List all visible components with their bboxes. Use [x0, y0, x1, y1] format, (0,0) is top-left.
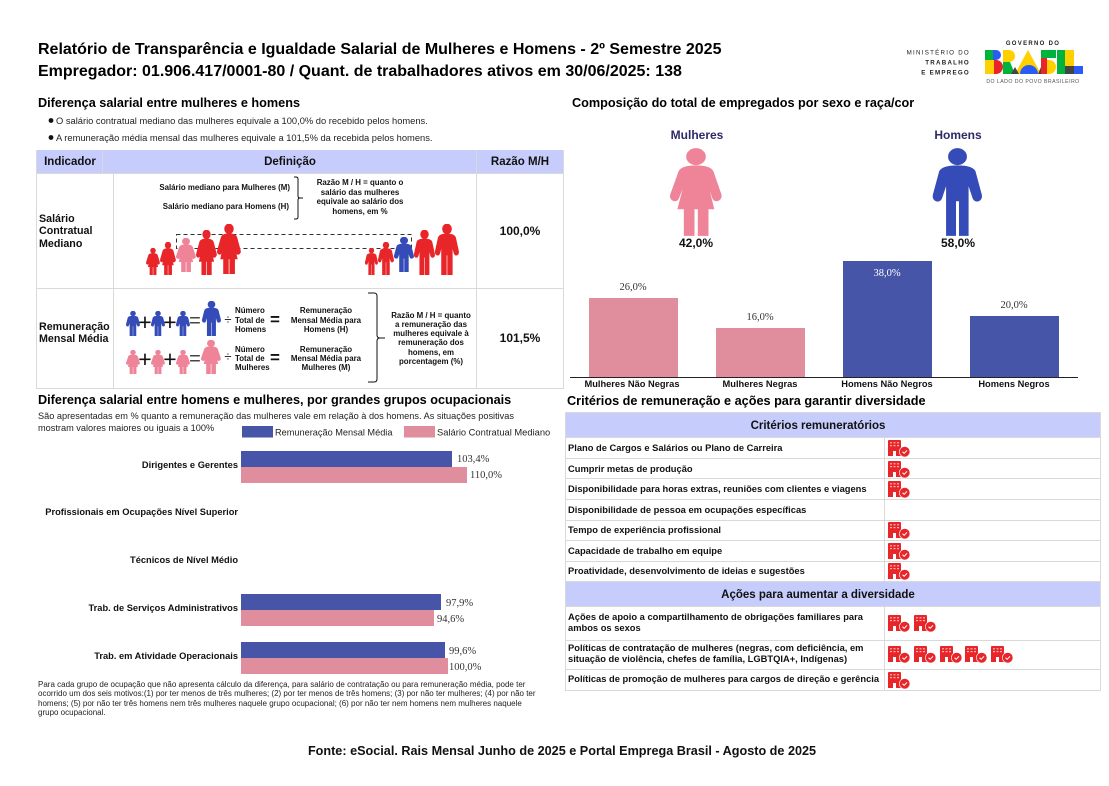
bar chart: grupos ocupacionais: 97,9%: [446, 598, 473, 609]
formula: women average: +: [138, 346, 152, 372]
bar chart: grupos ocupacionais: 110,0%: [470, 470, 502, 481]
table header: Indicador: [44, 156, 96, 168]
panel: indicator table: [36, 150, 564, 388]
dashed median box: [176, 234, 412, 248]
action labels: Ações de apoio a compartilhamento de obrigações familiares para: [568, 612, 864, 622]
formula: men average: Remuneração: [300, 306, 352, 315]
brace 2: [368, 293, 385, 382]
bar chart: grupos ocupacionais: 99,6%: [449, 646, 476, 657]
formula: women average: Mulheres: [235, 363, 270, 372]
text block: footnote: grupo ocupacional.: [38, 708, 106, 717]
icons: building check: [888, 440, 1013, 689]
formula: men average: [126, 301, 362, 336]
logo: governo do brasil: DO LADO DO POVO BRASILEIRO: [986, 79, 1080, 85]
header: ações: Ações para aumentar a diversidade: [721, 589, 915, 601]
formula: women average: Mulheres (M): [302, 363, 351, 372]
title: Relatório de Transparência e Igualdade Salarial de Mulheres e Homens - 2º Semestre 2025: [38, 41, 722, 58]
formula: women average: =: [270, 348, 280, 367]
text block: chart description: [38, 411, 514, 433]
row label: remuneração mensal média: [39, 321, 110, 345]
definition: razão text 2: Razão M / H = quanto: [391, 311, 471, 320]
criteria labels: Disponibilidade para horas extras, reuniões com clientes e viagens: [568, 484, 867, 494]
formula: women average: =: [189, 348, 201, 370]
row label: salário contratual mediano: Mediano: [39, 238, 83, 250]
bar chart: composição: 26,0%: [619, 282, 647, 293]
definition: razão text 2: porcentagem (%): [399, 357, 463, 366]
definition: razão text 1: equivale ao salário dos: [317, 197, 404, 206]
action labels: ambos os sexos: [568, 623, 641, 633]
row label: salário contratual mediano: [39, 213, 92, 250]
text block: bullets: [49, 116, 432, 143]
formula: women average: +: [163, 346, 177, 372]
header: critérios remuneratórios: Critérios remuneratórios: [751, 420, 885, 432]
row label: salário contratual mediano: Contratual: [39, 225, 92, 237]
logo: ministério do trabalho e emprego: TRABALHO: [925, 60, 970, 66]
legend: [242, 426, 550, 438]
title: Empregador: 01.906.417/0001-80 / Quant. de trabalhadores ativos em 30/06/2025: 138: [38, 63, 682, 80]
text block: footnote: Para cada grupo de ocupação que não apresenta cálculo da diferença, para salário de contratação ou para remuneração média, pode ter: [38, 680, 526, 689]
bar chart: composição: [570, 261, 1078, 389]
pictogram: homens: 58,0%: [941, 236, 975, 250]
definition: salário mediano labels: [159, 183, 290, 211]
icons: men group: [365, 224, 458, 275]
definition: razão text 1: Razão M / H = quanto o: [317, 178, 403, 187]
heading: diferença por grupos: Diferença salarial entre homens e mulheres, por grandes grupos ocupacionais: [38, 393, 511, 407]
formula: women average: Total de: [235, 354, 265, 363]
formula: men average: Homens (H): [304, 325, 349, 334]
text block: footnote: [38, 680, 536, 717]
formula: men average: +: [163, 309, 177, 335]
row label: remuneração mensal média: Remuneração: [39, 321, 110, 333]
pictogram: mulheres: [670, 128, 724, 250]
formula: women average: ÷: [224, 349, 232, 364]
formula: women average: Remuneração: [300, 345, 352, 354]
source footer: Fonte: eSocial. Rais Mensal Junho de 2025 e Portal Emprega Brasil - Agosto de 2025: [308, 744, 816, 758]
text block: chart description: São apresentadas em % quanto a remuneração das mulheres vale em relação à dos homens. As situações positivas: [38, 411, 514, 421]
formula: women average: [126, 340, 362, 374]
legend: Salário Contratual Mediano: [437, 428, 550, 438]
heading: critérios: Critérios de remuneração e ações para garantir diversidade: [567, 394, 926, 408]
row label: salário contratual mediano: Salário: [39, 213, 75, 225]
definition: razão text 2: a remuneração das: [395, 320, 468, 329]
definition: razão text 1: [317, 178, 404, 216]
title: [38, 41, 722, 80]
bar chart: grupos ocupacionais: Profissionais em Ocupações Nível Superior: [45, 507, 238, 517]
definition: razão text 2: remuneração dos: [398, 338, 465, 347]
bar chart: grupos ocupacionais: 100,0%: [449, 662, 482, 673]
criteria labels: [568, 443, 867, 576]
value: 100,0%: 100,0%: [500, 224, 541, 238]
panel: criteria table: [565, 412, 1101, 690]
row label: remuneração mensal média: Mensal Média: [39, 333, 110, 345]
action labels: [568, 612, 880, 684]
table header: Definição: [264, 156, 316, 168]
definition: razão text 2: mulheres equivale à: [393, 329, 469, 338]
bar chart: composição: 16,0%: [746, 312, 774, 323]
text block: bullets: A remuneração média mensal das mulheres equivale a 101,5% da recebida pelos homens.: [56, 133, 432, 143]
bar chart: composição: Mulheres Negras: [723, 379, 797, 389]
formula: men average: +: [138, 309, 152, 335]
text block: chart description: mostram valores maiores ou iguais a 100%: [38, 423, 214, 433]
criteria labels: Cumprir metas de produção: [568, 464, 693, 474]
formula: men average: Número: [235, 306, 265, 315]
heading: composição: Composição do total de empregados por sexo e raça/cor: [572, 96, 914, 110]
brace 1: [294, 177, 303, 219]
bar chart: grupos ocupacionais: [45, 451, 502, 674]
bar chart: grupos ocupacionais: Trab. de Serviços Administrativos: [88, 603, 238, 613]
logo: governo do brasil: [985, 41, 1083, 85]
pictogram: homens: [933, 128, 982, 250]
bar chart: grupos ocupacionais: Dirigentes e Gerentes: [142, 460, 238, 470]
criteria labels: Tempo de experiência profissional: [568, 525, 721, 535]
formula: men average: Mensal Média para: [291, 316, 362, 325]
definition: razão text 1: homens, em %: [332, 207, 388, 216]
bar chart: composição: Mulheres Não Negras: [584, 379, 680, 389]
table header: Razão M/H: [491, 156, 549, 168]
table header: [44, 156, 549, 168]
bar chart: composição: 20,0%: [1000, 300, 1028, 311]
bar chart: grupos ocupacionais: Técnicos de Nível Médio: [130, 555, 238, 565]
text block: footnote: ocorrido um dos seis motivos:(1) por ter menos de três mulheres; (2) por ter menos de três homens; (3) por não ter mulheres; (4) por não ter: [38, 689, 536, 698]
heading: diferença salarial: Diferença salarial entre mulheres e homens: [38, 96, 300, 110]
formula: women average: Mensal Média para: [291, 354, 362, 363]
criteria labels: Capacidade de trabalho em equipe: [568, 546, 722, 556]
value: 101,5%: 101,5%: [500, 331, 541, 345]
pictogram: mulheres: Mulheres: [671, 128, 724, 142]
action labels: Políticas de contratação de mulheres (negras, com deficiência, em: [568, 643, 863, 653]
bar chart: composição: Homens Negros: [978, 379, 1050, 389]
action labels: Políticas de promoção de mulheres para cargos de direção e gerência: [568, 674, 880, 684]
text block: bullets: O salário contratual mediano das mulheres equivale a 100,0% do recebido pelos homens.: [56, 116, 428, 126]
pictogram: homens: Homens: [934, 128, 982, 142]
logo: ministério do trabalho e emprego: E EMPREGO: [921, 70, 970, 76]
formula: men average: =: [189, 310, 201, 332]
logo: ministério do trabalho e emprego: MINISTÉRIO DO: [907, 50, 970, 56]
definition: razão text 2: homens, em: [408, 348, 454, 357]
logo: governo do brasil: GOVERNO DO: [1006, 41, 1060, 47]
definition: razão text 1: salário das mulheres: [321, 188, 400, 197]
bar chart: composição: 38,0%: [873, 268, 901, 279]
criteria labels: Disponibilidade de pessoa em ocupações específicas: [568, 505, 806, 515]
text block: footnote: homens; (5) por não ter três homens nem três mulheres naquele grupo ocupacional; (6) por não ter nem homens nem mulheres naquele: [38, 699, 522, 708]
legend: Remuneração Mensal Média: [275, 428, 393, 438]
criteria labels: Proatividade, desenvolvimento de ideias e sugestões: [568, 566, 805, 576]
definition: razão text 2: [391, 311, 471, 366]
formula: men average: ÷: [224, 312, 232, 327]
criteria labels: Plano de Cargos e Salários ou Plano de Carreira: [568, 443, 783, 453]
action labels: situação de violência, chefes de família, LGBTQIA+, Indígenas): [568, 654, 847, 664]
definition: salário mediano labels: Salário mediano para Homens (H): [163, 202, 289, 211]
pictogram: mulheres: 42,0%: [679, 236, 713, 250]
bar chart: grupos ocupacionais: 94,6%: [437, 614, 464, 625]
formula: men average: Homens: [235, 325, 267, 334]
formula: men average: Total de: [235, 316, 265, 325]
icons: women group: [146, 224, 240, 275]
formula: women average: Número: [235, 345, 265, 354]
definition: salário mediano labels: Salário mediano para Mulheres (M): [159, 183, 290, 192]
bar chart: composição: Homens Não Negros: [841, 379, 933, 389]
logo: ministério do trabalho e emprego: [907, 50, 970, 76]
formula: men average: =: [270, 310, 280, 329]
bar chart: grupos ocupacionais: Trab. em Atividade Operacionais: [94, 651, 238, 661]
bar chart: grupos ocupacionais: 103,4%: [457, 454, 490, 465]
